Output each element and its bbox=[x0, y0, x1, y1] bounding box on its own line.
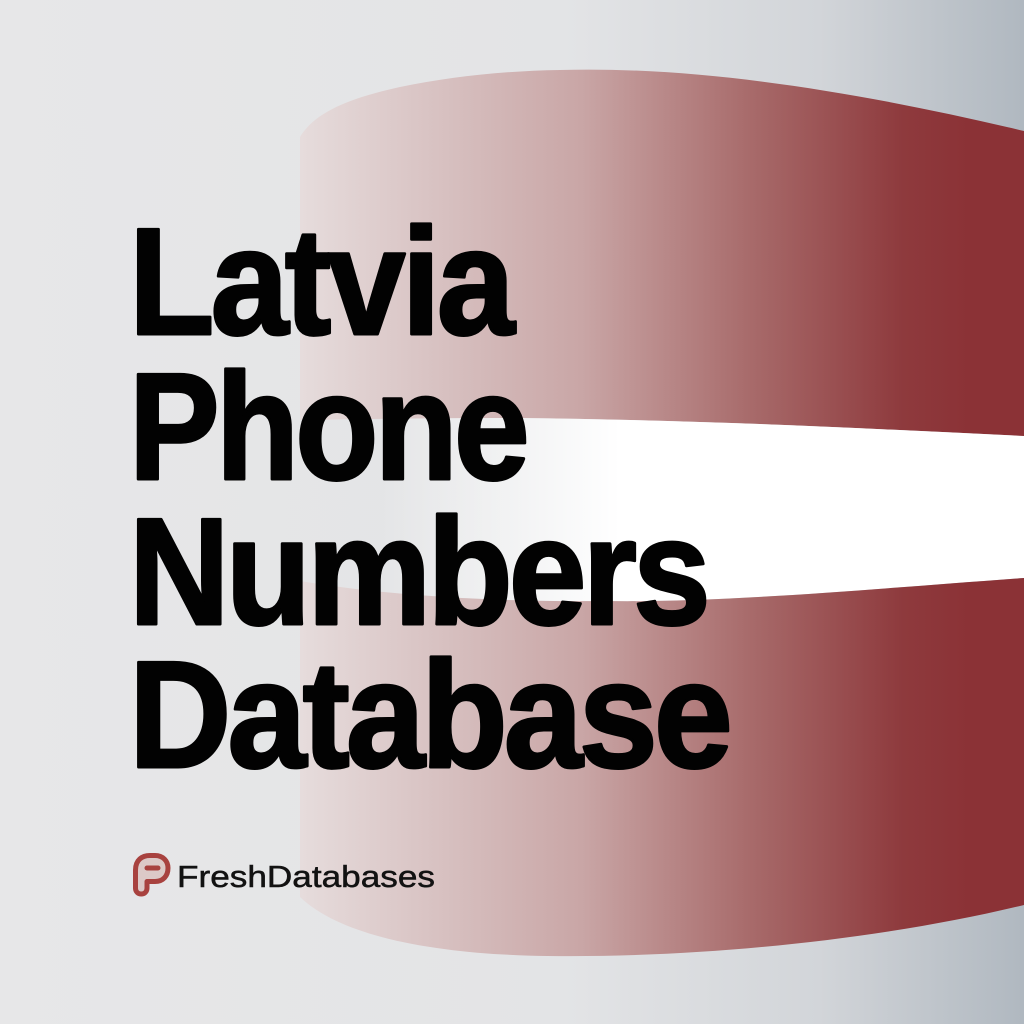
brand logo bbox=[136, 856, 435, 894]
icon: FreshDatabases P mark bbox=[136, 856, 168, 894]
title line: Latvia: Latvia bbox=[129, 197, 516, 367]
title line: Database: Database bbox=[129, 630, 729, 800]
flag: white middle band bbox=[300, 418, 1024, 601]
flag: lower red band bbox=[300, 578, 1024, 956]
title bbox=[129, 197, 729, 800]
flag: upper red band bbox=[300, 70, 1024, 436]
brand name: FreshDatabases bbox=[177, 859, 435, 894]
title line: Numbers: Numbers bbox=[129, 487, 707, 657]
title line: Phone: Phone bbox=[129, 342, 526, 512]
